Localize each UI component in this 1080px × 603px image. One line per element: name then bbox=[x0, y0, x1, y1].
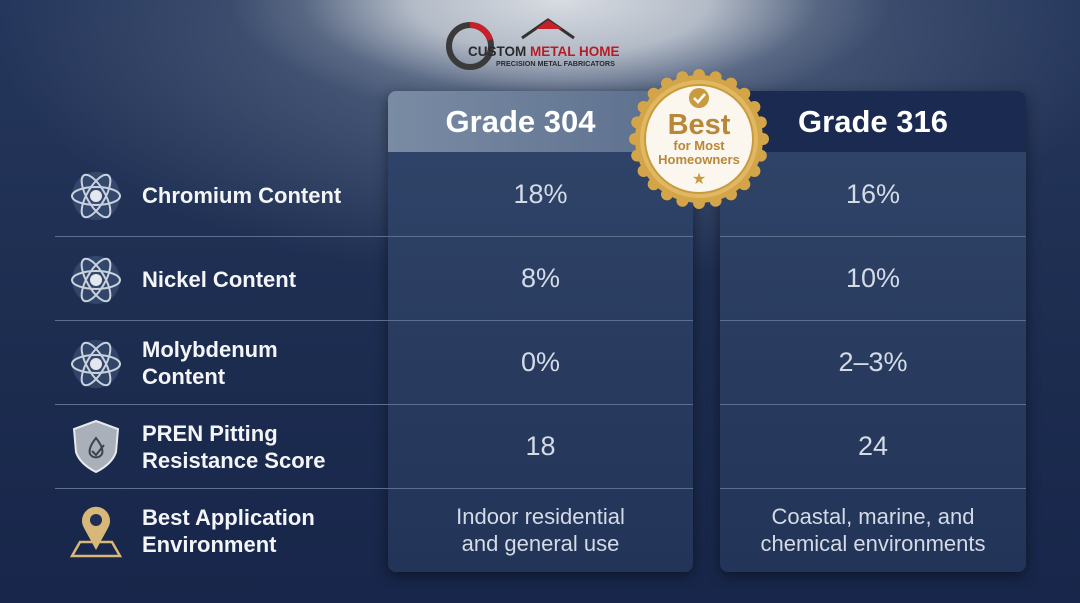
label: Best Application: Environment bbox=[142, 532, 276, 557]
label: Best Application: Best Application bbox=[142, 505, 315, 530]
icon: atom 2 bbox=[71, 256, 121, 304]
column: Grade 304: Indoor residential bbox=[456, 504, 625, 529]
icon: atom 1 bbox=[71, 172, 121, 220]
column: Grade 316: 2–3% bbox=[838, 346, 908, 376]
column: Grade 316: 10% bbox=[846, 262, 900, 292]
label: Molybdenum: Content bbox=[142, 364, 225, 389]
column: Grade 304: 18% bbox=[513, 178, 568, 208]
header 304: Grade 304 bbox=[446, 104, 595, 138]
logo: CUSTOM METAL HOME bbox=[468, 44, 620, 59]
header 304 bbox=[388, 91, 693, 152]
logo bbox=[446, 18, 620, 70]
label: PREN: Resistance Score bbox=[142, 448, 325, 473]
icon: shield bbox=[72, 420, 120, 474]
badge: Best for Most Homeowners: for Most bbox=[673, 138, 725, 153]
column: Grade 304 bbox=[388, 91, 693, 572]
column: Grade 316 bbox=[720, 91, 1026, 572]
badge: Best for Most Homeowners: Best bbox=[668, 109, 731, 141]
column: Grade 304: 18 bbox=[525, 430, 556, 460]
column: Grade 304: 8% bbox=[521, 262, 560, 292]
column: Grade 304: and general use bbox=[462, 531, 619, 556]
column: Grade 316: Coastal, marine, and bbox=[771, 504, 974, 529]
label: Molybdenum: Molybdenum bbox=[142, 337, 278, 362]
label: Molybdenum bbox=[142, 337, 278, 389]
header 316 bbox=[720, 91, 1026, 152]
column: Grade 304: 0% bbox=[521, 346, 560, 376]
header 316: Grade 316 bbox=[798, 104, 948, 138]
badge: Best for Most Homeowners: Homeowners bbox=[658, 152, 740, 167]
icon: atom 3 bbox=[71, 340, 121, 388]
icon: location pin bbox=[70, 506, 122, 558]
label: PREN bbox=[142, 421, 325, 473]
label: PREN: PREN Pitting bbox=[142, 421, 278, 446]
label: Nickel: Nickel Content bbox=[142, 266, 296, 292]
column: Grade 316: 16% bbox=[846, 178, 900, 208]
logo: PRECISION METAL FABRICATORS bbox=[496, 59, 615, 68]
column: Grade 316: 24 bbox=[858, 430, 888, 460]
column: Grade 316: chemical environments bbox=[760, 531, 985, 556]
label: Best Application bbox=[142, 505, 315, 557]
label: Chromium: Chromium Content bbox=[142, 182, 341, 208]
badge: Best for Most Homeowners bbox=[629, 69, 769, 209]
badge: Best for Most Homeowners: ★ bbox=[692, 171, 706, 188]
